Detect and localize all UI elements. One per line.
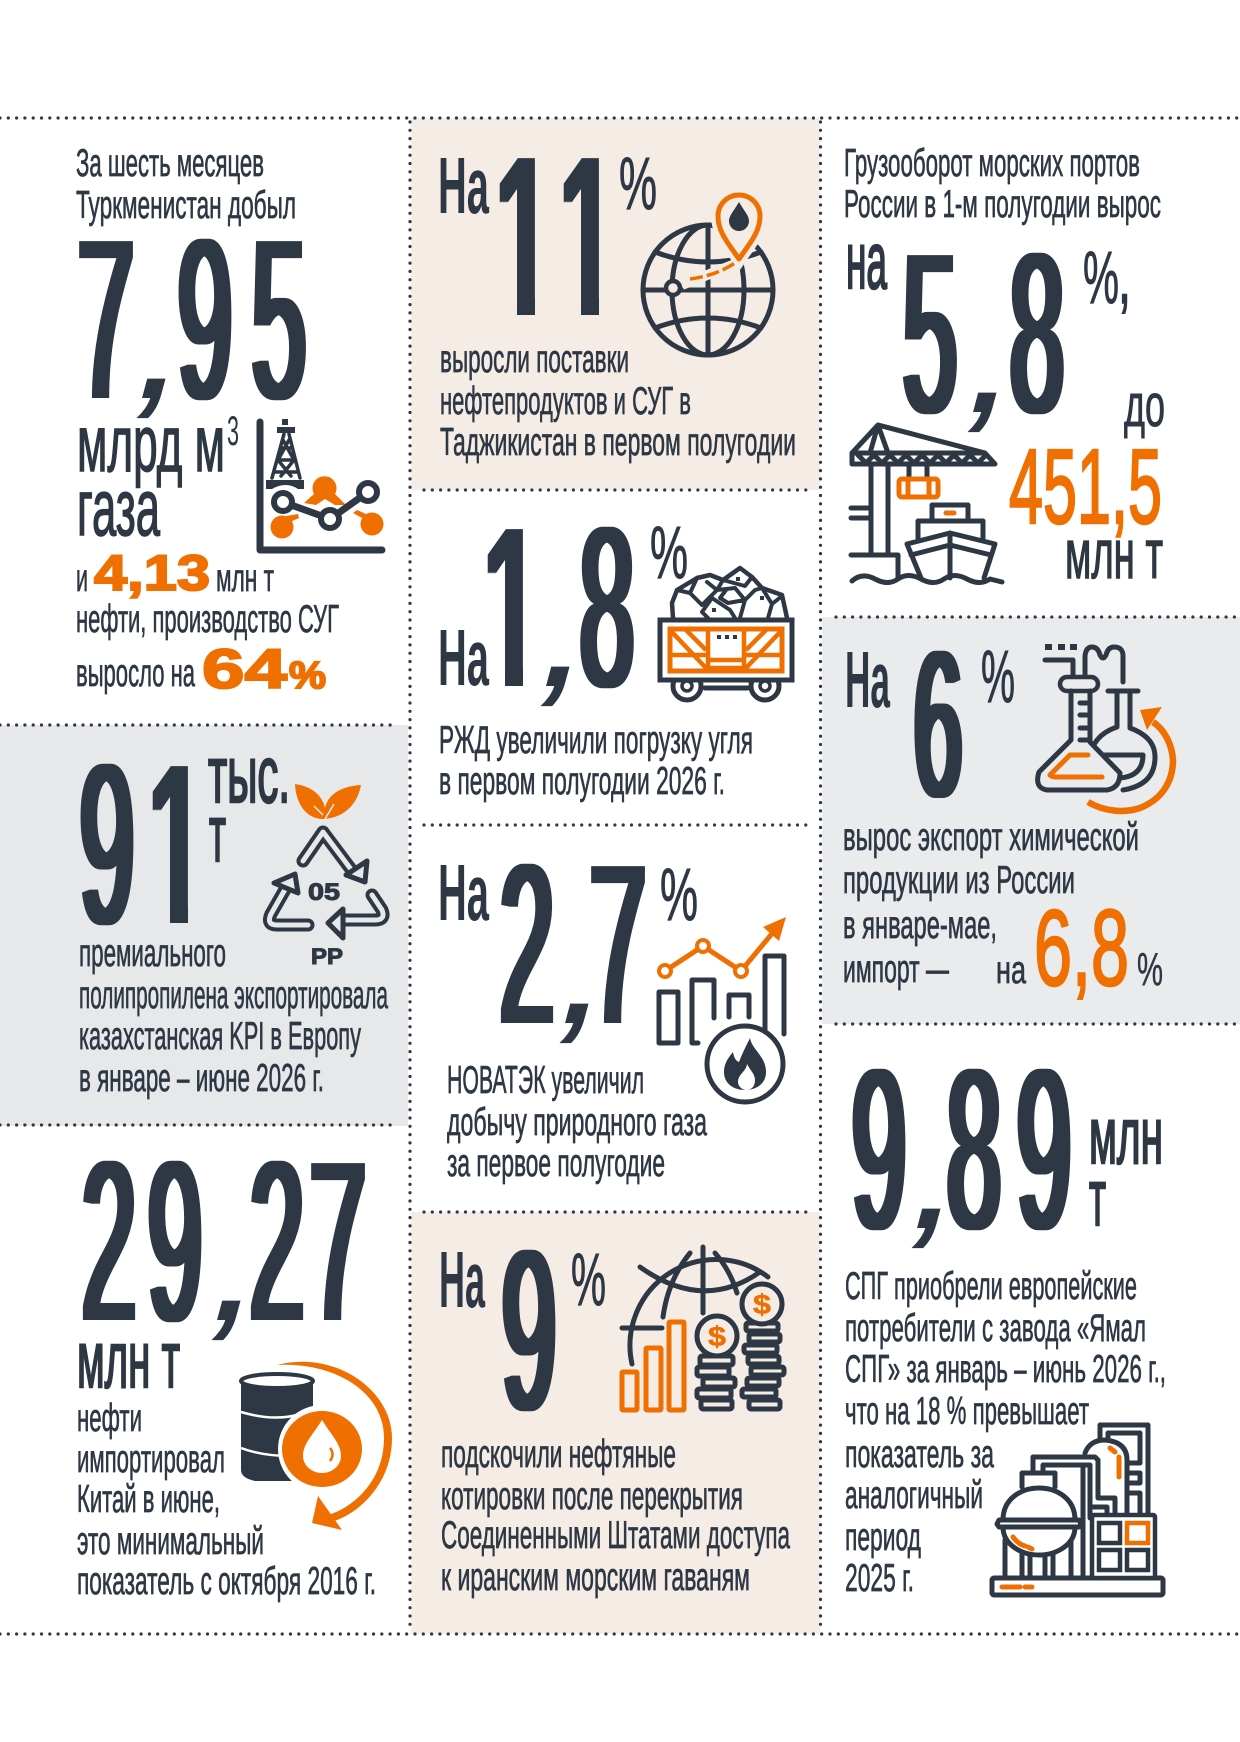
- description text: [439, 719, 753, 803]
- big number На 6 %: На: [845, 635, 890, 724]
- panel: China oil imports: [77, 1115, 392, 1603]
- big number 9,89: 9: [852, 1023, 906, 1277]
- big number На 1,8 %: [440, 526, 687, 706]
- big number 91: [80, 764, 188, 926]
- big number 29,27: 9: [148, 1115, 202, 1369]
- big number 29,27: 2: [250, 1115, 304, 1369]
- description text: добычу природного газа: [447, 1101, 707, 1144]
- description text: подскочили нефтяные: [441, 1433, 676, 1476]
- description text: импортировал: [77, 1438, 225, 1481]
- description text: [843, 816, 1139, 991]
- description text: выросли поставки: [440, 338, 629, 381]
- big number На 6 %: 6: [914, 609, 962, 841]
- big number На 2,7 %: 7: [590, 818, 646, 1072]
- panel: chemical exports: [822, 609, 1240, 1024]
- big number на 5,8 %,: ,: [1118, 231, 1131, 320]
- panel: oil quotes: [411, 1204, 820, 1634]
- description text: нефтепродуктов и СУГ в: [440, 380, 691, 423]
- description text: это минимальный: [77, 1520, 264, 1563]
- unit thousand tonnes: [208, 730, 290, 878]
- unit: billion cubic metres of gas: [77, 399, 239, 552]
- big number 29,27: 2: [82, 1115, 136, 1369]
- description text: к иранским морским гаваням: [441, 1556, 750, 1599]
- unit thousand tonnes: т: [209, 789, 226, 878]
- unit million tonnes: млн: [1089, 1091, 1163, 1180]
- description text: [845, 1265, 1166, 1600]
- big number На 11 %: 1: [493, 110, 555, 364]
- icon: recycling PP with leaves: 05: [308, 879, 340, 906]
- big number На 9 %: %: [571, 1238, 606, 1321]
- icon: recycling PP with leaves: PP: [311, 944, 343, 969]
- big number На 11 %: [440, 157, 656, 315]
- icon: recycling PP with leaves: [269, 784, 383, 969]
- panel: China oil imports: 7: [310, 1115, 366, 1369]
- big number 9,89: [852, 1023, 1071, 1277]
- big number 7,95: [78, 193, 306, 447]
- description text: Соединенными Штатами доступа: [441, 1514, 790, 1557]
- big number 29,27: [82, 1115, 366, 1369]
- description text: в январе-мае,: [843, 904, 997, 947]
- big number На 9 %: На: [439, 1235, 485, 1324]
- description text: Китай в июне,: [77, 1478, 220, 1521]
- oil and LPG text: нефти, производство СУГ: [76, 598, 339, 641]
- big number На 9 %: [439, 1204, 606, 1458]
- icon: globe bars and coins: $: [708, 1321, 726, 1352]
- description text: нефти: [77, 1397, 142, 1440]
- oil and LPG text: выросло на: [76, 652, 195, 695]
- icon: oil derrick with chart: [260, 419, 384, 550]
- big number 29,27: ,: [200, 1203, 275, 1348]
- panel: KPI polypropylene: 1: [146, 718, 208, 972]
- big number на 5,8 %,: 5: [903, 207, 957, 461]
- icon: oil barrel with arrow: [241, 1362, 392, 1530]
- big number 7,95: ,: [125, 281, 200, 426]
- intro text: [844, 142, 1161, 226]
- intro text: [76, 142, 296, 227]
- beige background: [411, 118, 820, 490]
- description text: Таджикистан в первом полугодии: [440, 421, 796, 464]
- import value на 6,8 %: [996, 887, 1163, 1008]
- description text: в январе – июне 2026 г.: [79, 1057, 324, 1100]
- unit million tonnes: т: [1089, 1153, 1106, 1242]
- description text: премиального: [79, 932, 226, 975]
- description text: показатель за: [845, 1433, 994, 1476]
- description text: в первом полугодии 2026 г.: [439, 760, 725, 803]
- unit: billion cubic metres of gas: газа: [77, 463, 160, 552]
- big number На 6 %: [845, 609, 1015, 841]
- description text: период: [845, 1516, 921, 1559]
- panel: Yamal LNG: 9: [1017, 1023, 1071, 1277]
- big number 91: 9: [80, 718, 134, 972]
- big number на 5,8 %,: [846, 207, 1131, 461]
- unit: billion cubic metres of gas: млрд м: [77, 399, 225, 488]
- import value на 6,8 %: на: [996, 949, 1026, 992]
- big number На 1,8 %: %: [650, 511, 688, 594]
- description text: [441, 1433, 790, 1599]
- oil and LPG text: 4,13: [94, 545, 210, 601]
- big number на 5,8 %,: 8: [1010, 207, 1064, 461]
- icon: globe with pin: [643, 195, 773, 355]
- unit: billion cubic metres of gas: 3: [227, 407, 239, 454]
- unit million tonnes: [1089, 1091, 1163, 1242]
- grey background: [0, 725, 408, 1126]
- description text: полипропилена экспортировала: [79, 974, 388, 1017]
- big number На 2,7 %: На: [438, 848, 489, 937]
- big number На 9 %: 9: [502, 1204, 556, 1458]
- panel: Turkmenistan production: 5: [252, 193, 306, 447]
- panel: Tajikistan supplies: [411, 110, 820, 490]
- description text: НОВАТЭК увеличил: [447, 1059, 644, 1102]
- big number на 5,8 %,: ,: [956, 295, 1031, 440]
- grey background: [822, 617, 1240, 1024]
- unit thousand tonnes: тыс.: [208, 730, 290, 819]
- panel: KPI polypropylene: [0, 718, 408, 1126]
- oil and LPG text: [76, 545, 339, 700]
- big number На 2,7 %: [438, 818, 698, 1072]
- panel: Novatek gas: [438, 818, 786, 1185]
- icon: LNG plant: [992, 1425, 1163, 1595]
- big number На 2,7 %: ,: [548, 906, 623, 1051]
- beige background: [411, 1212, 820, 1634]
- description text: показатель с октября 2016 г.: [77, 1560, 376, 1603]
- description text: [79, 932, 388, 1100]
- target value до 451,5 млн т: [1009, 372, 1165, 593]
- description text: за первое полугодие: [447, 1142, 665, 1185]
- icon: coal wagon: [660, 568, 792, 700]
- big number На 6 %: %: [981, 635, 1015, 718]
- big number 9,89: 8: [947, 1023, 1001, 1277]
- description text: казахстанская KPI в Европу: [79, 1015, 361, 1058]
- panel: sea ports: [844, 142, 1165, 593]
- target value до 451,5 млн т: млн т: [1065, 515, 1163, 593]
- big number 7,95: 7: [78, 193, 134, 447]
- oil and LPG text: и: [76, 557, 88, 600]
- panel: Turkmenistan production: [76, 142, 384, 700]
- description text: 2025 г.: [845, 1557, 914, 1600]
- oil and LPG text: млн т: [216, 557, 274, 600]
- import value на 6,8 %: 6,8: [1034, 887, 1129, 1008]
- big number На 11 %: 1: [557, 110, 619, 364]
- description text: продукции из России: [843, 859, 1075, 902]
- panel: Russian Railways coal: [440, 526, 794, 802]
- intro text: Туркменистан добыл: [76, 184, 296, 227]
- intro text: За шесть месяцев: [76, 142, 264, 185]
- big number на 5,8 %,: на: [846, 216, 887, 305]
- description text: [440, 338, 796, 464]
- big number На 1,8 %: ,: [529, 569, 604, 714]
- big number 7,95: 9: [178, 193, 232, 447]
- oil and LPG text: 64: [202, 637, 287, 700]
- import value на 6,8 %: %: [1137, 943, 1163, 995]
- description text: аналогичный: [845, 1474, 983, 1517]
- target value до 451,5 млн т: до: [1124, 372, 1165, 439]
- big number На 1,8 %: 8: [580, 481, 634, 735]
- big number На 2,7 %: 2: [500, 818, 554, 1072]
- icon: growth chart with gas flame: [659, 917, 786, 1102]
- big number На 2,7 %: %: [660, 853, 698, 936]
- big number 9,89: ,: [900, 1111, 975, 1256]
- description text: [447, 1059, 707, 1185]
- icon: port crane and ship: [851, 425, 1002, 582]
- panel: Yamal LNG: [845, 1023, 1166, 1600]
- big number На 1,8 %: 1: [481, 481, 543, 735]
- big number на 5,8 %,: %: [1083, 236, 1119, 319]
- big number На 11 %: %: [619, 142, 657, 225]
- description text: импорт —: [843, 948, 949, 991]
- icon: chemical flasks with arrow: [1038, 644, 1173, 811]
- unit million tonnes: млн т: [77, 1315, 180, 1404]
- description text: [77, 1397, 376, 1603]
- icon: globe bars and coins: [622, 1247, 784, 1410]
- big number На 1,8 %: На: [438, 613, 489, 702]
- icon: globe bars and coins: $: [753, 1289, 771, 1320]
- big number На 11 %: На: [438, 141, 489, 230]
- description text: котировки после перекрытия: [441, 1475, 743, 1518]
- oil and LPG text: %: [289, 655, 326, 697]
- description text: РЖД увеличили погрузку угля: [439, 719, 753, 762]
